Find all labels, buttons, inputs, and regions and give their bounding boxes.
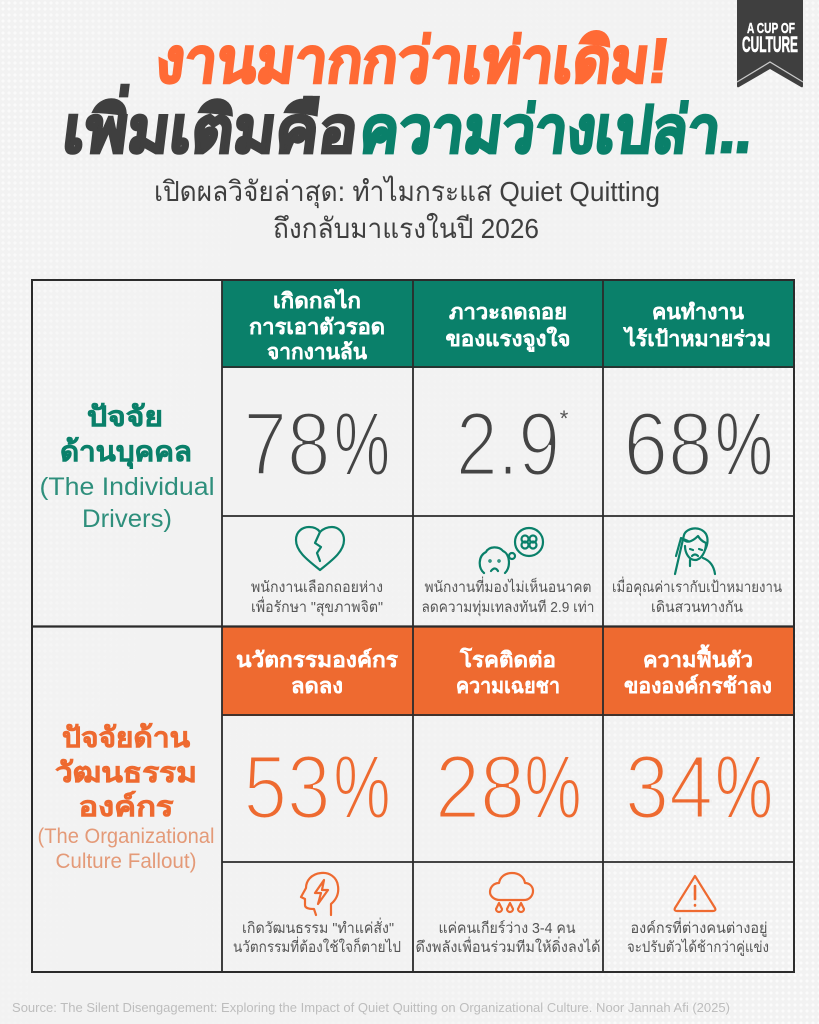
- source note: Source: The Silent Disengagement: Exploring the Impact of Quiet Quitting on Organizational Culture. Noor Jannah Afi (2025): [12, 1000, 730, 1015]
- heading: innovation down: นวัตกรรมองค์กร: [236, 648, 399, 672]
- stat: 68%: %: [715, 395, 773, 495]
- heading: slower recovery: ขององค์กรช้าลง: [624, 674, 772, 698]
- title line 1: งานมากกว่าเท่าเดิม!: [152, 27, 673, 96]
- subtitle: [154, 176, 660, 244]
- panel: individual drivers label: ปัจจัย: [87, 401, 163, 432]
- heading: innovation down: [236, 648, 399, 698]
- icon: broken heart: [296, 527, 344, 570]
- caption: orders culture: เกิดวัฒนธรรม "ทำแค่สั่ง": [242, 917, 394, 937]
- panel: organizational fallout label: Culture Fallout): [56, 850, 196, 873]
- heading: slower recovery: ความฟื้นตัว: [643, 644, 753, 672]
- caption: future: ลดความทุ่มเทลงทันที 2.9 เท่า: [422, 599, 594, 617]
- panel: organizational fallout label: ปัจจัยด้าน: [62, 722, 190, 753]
- caption: heart: [251, 579, 383, 617]
- heading: no shared goal: ไร้เป้าหมายร่วม: [623, 326, 771, 351]
- panel: organizational fallout label: [38, 722, 214, 873]
- caption: orders culture: นวัตกรรมที่ต้องใช้ใจก็ตายไป: [233, 936, 401, 956]
- heading: motivation decline: [446, 301, 570, 353]
- title line 2: เพิ่มเติมคือ: [59, 84, 363, 166]
- stat: 34%: 34: [625, 738, 713, 838]
- stat: 2.9: 2.9: [456, 395, 560, 495]
- caption: orders culture: [233, 917, 401, 956]
- stat: 78%: %: [334, 395, 390, 495]
- panel: organizational fallout label: องค์กร: [78, 791, 174, 822]
- subtitle: เปิดผลวิจัยล่าสุด: ทำไมกระแส Quiet Quitting: [154, 176, 660, 209]
- stat: 78%: [244, 395, 390, 495]
- header band: organizational: [222, 626, 794, 716]
- panel: individual drivers label: ด้านบุคคล: [60, 436, 192, 469]
- panel: organizational fallout label: (The Organizational: [38, 825, 214, 848]
- panel: individual drivers label: [40, 401, 214, 533]
- logo ribbon: [737, 0, 803, 87]
- panel: individual drivers label: Drivers): [82, 505, 172, 533]
- icon: head with lightning: [301, 873, 338, 915]
- caption: future: พนักงานที่มองไม่เห็นอนาคต: [424, 576, 592, 596]
- subtitle: ถึงกลับมาแรงในปี 2026: [273, 212, 539, 244]
- stat: 68%: 68: [624, 395, 712, 495]
- heading: contagious indifference: ความเฉยชา: [456, 675, 560, 698]
- caption: goals: เมื่อคุณค่าเรากับเป้าหมายงาน: [612, 576, 782, 597]
- heading: no shared goal: [623, 301, 771, 351]
- heading: slower recovery: [624, 644, 772, 698]
- heading: survival mechanism: การเอาตัวรอด: [249, 316, 385, 339]
- title line 2: ความว่างเปล่า..: [356, 94, 757, 166]
- icon: rain cloud: [490, 873, 533, 912]
- stat: 34%: %: [715, 738, 773, 838]
- heading: contagious indifference: [456, 647, 560, 698]
- caption: heart: เพื่อรักษา "สุขภาพจิต": [251, 596, 383, 617]
- stat: 28%: %: [524, 738, 582, 838]
- icon: stressed woman: [675, 528, 715, 574]
- header band: individual: [222, 280, 794, 368]
- panel: individual drivers label: (The Individual: [40, 473, 214, 501]
- caption: organization: จะปรับตัวได้ช้ากว่าคู่แข่ง: [627, 938, 769, 956]
- caption: goals: [612, 576, 782, 616]
- panel: organizational fallout label: วัฒนธรรม: [55, 757, 197, 788]
- heading: survival mechanism: [249, 288, 385, 364]
- icon: sad head with thought bubble: [480, 528, 543, 573]
- heading: survival mechanism: เกิดกลไก: [273, 288, 361, 313]
- caption: future: [422, 576, 594, 617]
- title line 2: [59, 84, 757, 166]
- stat: 28%: [435, 738, 582, 838]
- heading: motivation decline: ของแรงจูงใจ: [446, 326, 570, 353]
- heading: contagious indifference: โรคติดต่อ: [459, 647, 556, 672]
- stat: 53%: [244, 738, 390, 838]
- icon: warning triangle: [675, 876, 715, 911]
- caption: heart: พนักงานเลือกถอยห่าง: [251, 579, 383, 596]
- table grid: [32, 280, 794, 972]
- caption: organization: [627, 917, 769, 956]
- heading: motivation decline: ภาวะถดถอย: [449, 301, 567, 324]
- heading: no shared goal: คนทำงาน: [652, 301, 745, 324]
- stat: 53%: %: [334, 738, 390, 838]
- stat: 28%: 28: [435, 738, 525, 838]
- caption: organization: องค์กรที่ต่างคนต่างอยู่: [630, 917, 768, 937]
- heading: survival mechanism: จากงานล้น: [267, 340, 368, 364]
- logo ribbon: A CUP OF: [747, 20, 795, 37]
- caption: goals: เดินสวนทางกัน: [651, 599, 743, 616]
- stat: 78%: 78: [244, 395, 330, 495]
- stat: 2.9: *: [560, 406, 569, 431]
- stat: 34%: [625, 738, 773, 838]
- caption: colleagues: [416, 920, 600, 956]
- stat: 53%: 53: [244, 738, 330, 838]
- caption: colleagues: ดึงพลังเพื่อนร่วมทีมให้ดิ่งลงได้: [416, 936, 600, 956]
- stat: 68%: [624, 395, 773, 495]
- heading: innovation down: ลดลง: [291, 675, 343, 698]
- caption: colleagues: แค่คนเกียร์ว่าง 3-4 คน: [438, 920, 576, 937]
